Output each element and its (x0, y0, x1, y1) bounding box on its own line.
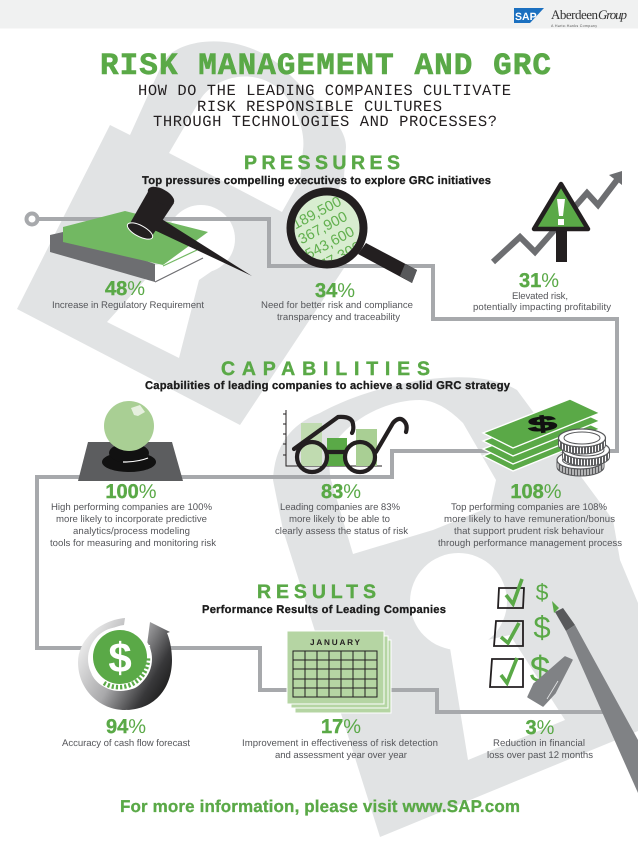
stat: 34%: Need for better risk and compliance (261, 300, 413, 311)
icon: magnifier: 189,500 (290, 194, 344, 233)
icon: checklist and pen (490, 579, 638, 793)
logos: SAP and Aberdeen Group: A Harte-Hanks Company (551, 24, 597, 28)
stat: 83%: 83% (321, 481, 361, 503)
heading: results: RESULTS (257, 581, 376, 603)
icon: calendar (287, 631, 391, 713)
stat: 31%: potentially impacting profitability (473, 302, 611, 313)
stat: 17%: Improvement in effectiveness of risk detection (242, 738, 438, 749)
icon: crystal ball (78, 401, 183, 481)
icon: dollar coin with circular arrow: $ (108, 634, 132, 681)
header band (0, 0, 638, 28)
stat: 108%: 108% (510, 481, 562, 503)
connector line with start ring (26, 214, 617, 712)
stat: 83%: Leading companies are 83% (280, 502, 400, 513)
stat: 3%: 3% (526, 717, 555, 739)
stat: 83%: more likely to be able to (289, 514, 390, 525)
stat: 100% (50, 481, 216, 549)
icon: money stack and coins (483, 399, 610, 476)
background: lower padlock (273, 377, 638, 837)
icon: book and gavel (50, 183, 252, 282)
stat: 3% (487, 717, 593, 761)
subheading: pressures: Top pressures compelling executives to explore GRC initiatives (142, 175, 491, 187)
stat: 94%: 94% (106, 716, 146, 738)
subtitle: RISK RESPONSIBLE CULTURES (197, 98, 442, 116)
stat: 48%: 48% (105, 278, 145, 300)
stat: 108%: more likely to have remuneration/bonus (444, 514, 615, 525)
stat: 34% (261, 280, 413, 323)
icon: magnifier: 543,600 (303, 224, 357, 263)
subheading: results: Performance Results of Leading Companies (202, 604, 446, 616)
icon: magnifier (290, 192, 417, 283)
stat: 31% (473, 270, 611, 313)
logos: SAP and Aberdeen Group (514, 7, 628, 28)
stat: 17%: and assessment year over year (275, 750, 408, 761)
icon: magnifier: 367,900 (296, 209, 350, 248)
stat: 94%: Accuracy of cash flow forecast (62, 738, 190, 749)
stat: 100%: tools for measuring and monitoring risk (50, 538, 216, 549)
stat: 108%: through performance management process (438, 538, 622, 549)
subtitle: THROUGH TECHNOLOGIES AND PROCESSES? (153, 113, 497, 131)
stat: 108%: that support prudent risk behaviour (454, 526, 605, 537)
stat: 17% (242, 716, 438, 761)
logos: SAP and Aberdeen Group: SAP (515, 11, 537, 23)
stat: 100%: more likely to incorporate predictive (56, 514, 207, 525)
stat: 31%: 31% (519, 270, 559, 292)
subheading: capabilities: Capabilities of leading companies to achieve a solid GRC strategy (145, 380, 511, 392)
background: upper padlock (17, 41, 348, 425)
icon: checklist and pen: $ (533, 610, 551, 645)
stat: 83%: clearly assess the status of risk (275, 526, 408, 537)
stat: 100%: 100% (105, 481, 157, 503)
stat: 31%: Elevated risk, (512, 291, 568, 302)
stat: 34%: transparency and traceability (277, 312, 400, 323)
icon: checklist and pen: $ (530, 649, 550, 690)
icon: money stack and coins: $ (527, 411, 559, 437)
stat: 3%: Reduction in financial (493, 738, 585, 749)
heading: capabilities: CAPABILITIES (221, 358, 430, 380)
icon: warning sign and rising arrow (493, 171, 622, 262)
stat: 108% (438, 481, 622, 549)
heading: pressures: PRESSURES (244, 152, 400, 174)
logos: SAP and Aberdeen Group: Group (598, 7, 628, 22)
icon: calendar: JANUARY (310, 638, 361, 647)
icon: magnifier: 777,300 (310, 239, 364, 278)
stat: 48%: Increase in Regulatory Requirement (52, 300, 204, 311)
icon: chart and glasses (283, 410, 407, 472)
stat: 48% (52, 278, 204, 311)
stat: 108%: Top performing companies are 108% (451, 502, 607, 513)
stat: 17%: 17% (321, 716, 361, 738)
footer call to action: For more information, please visit www.SAP.com (120, 797, 520, 816)
stat: 34%: 34% (315, 280, 355, 302)
subtitle (138, 82, 511, 131)
stat: 100%: analytics/process modeling (73, 526, 190, 537)
logos: SAP and Aberdeen Group: Aberdeen (551, 7, 598, 22)
icon: dollar coin with circular arrow (78, 618, 172, 710)
stat: 94% (62, 716, 190, 749)
subtitle: HOW DO THE LEADING COMPANIES CULTIVATE (138, 82, 511, 100)
icon: checklist and pen: $ (536, 579, 549, 605)
title: RISK MANAGEMENT AND GRC (100, 49, 551, 84)
stat: 100%: High performing companies are 100% (51, 502, 212, 513)
stat: 83% (275, 481, 408, 537)
stat: 3%: loss over past 12 months (487, 750, 593, 761)
